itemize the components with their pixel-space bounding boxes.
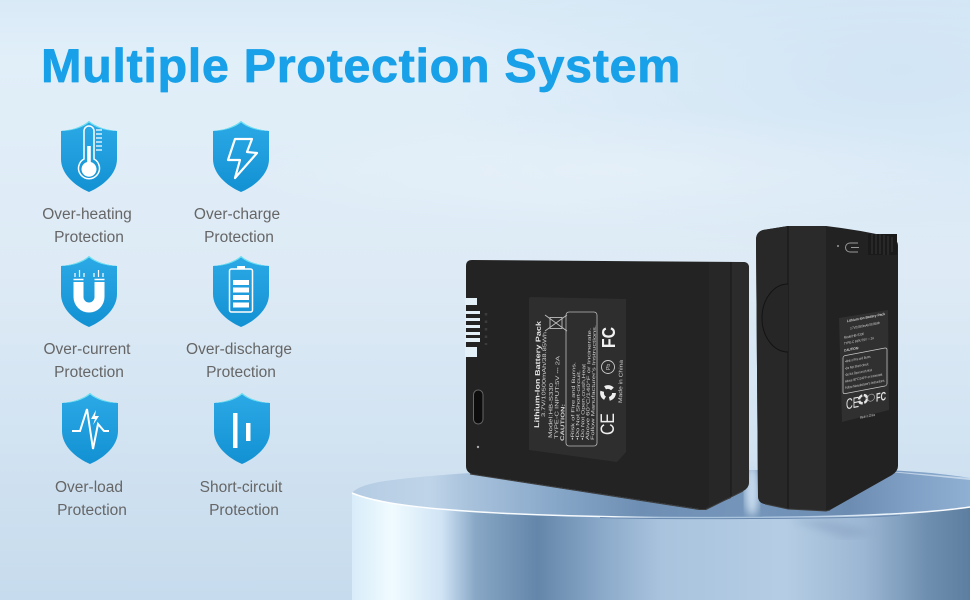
USB-C port (474, 390, 483, 424)
label: over-discharge protection: Protection (206, 364, 276, 381)
battery: side view with label (756, 226, 898, 511)
product label: •Risk of Fire and Burns. (845, 355, 871, 364)
product label: Follow Manufacturer's Instructions. (845, 379, 885, 390)
product label: TYPE-C INPUT:5V ⎓ 2A (554, 355, 561, 439)
label: short-circuit protection: Protection (209, 502, 279, 519)
icon: magnet shield (61, 256, 117, 327)
indicator light (477, 446, 479, 448)
top connector (837, 234, 897, 255)
feature: over-current protection (44, 256, 131, 381)
icon: pulse shield (62, 393, 118, 464)
product label: Follow Manufacturer's Instructions. (590, 325, 598, 440)
product label: •Do Not Open,crush,Heat (580, 363, 587, 440)
podium (352, 464, 970, 600)
label: over-discharge protection: Over-discharge (186, 341, 292, 358)
product label (529, 297, 626, 462)
product label: FC (599, 327, 619, 348)
thumb recess arc (762, 284, 788, 352)
label: over-heating protection: Over-heating (42, 206, 132, 223)
product label: CE (846, 394, 859, 413)
product label: •Do Not Short-circuit. (575, 370, 582, 440)
product label: TYPE-C INPUT:5V ⎓ 2A (844, 336, 874, 346)
label: over-load protection: Over-load (55, 479, 123, 496)
product label: Lithium-Ion Battery Pack (534, 321, 543, 428)
label: short-circuit protection: Short-circuit (200, 479, 283, 496)
product label: •Do Not Short-circuit. (845, 362, 869, 371)
label: over-charge protection: Protection (204, 229, 274, 246)
product label: Above 60°C/140°F or Incinerate. (585, 328, 593, 440)
title: Multiple Protection System (41, 40, 681, 93)
product label: 3.7V/10500mAh/38.85Wh (541, 332, 548, 417)
product label: CAUTION: (560, 404, 567, 441)
product label: FC (876, 389, 886, 405)
product label: 3.7V/10500mAh/38.85Wh (850, 321, 880, 331)
product label: Made in China (860, 413, 876, 420)
icon: battery shield (213, 256, 269, 327)
label: over-charge protection: Over-charge (194, 206, 280, 223)
icon: circuit gap shield (214, 393, 270, 464)
label: over-heating protection: Protection (54, 229, 124, 246)
feature: over-charge protection (194, 121, 280, 246)
product label: •Do Not Open,crush,Heat (845, 368, 872, 377)
label: over-current protection: Over-current (44, 341, 131, 358)
feature: over-heating protection (42, 121, 132, 246)
product label: Above 60°C/140°F or Incinerate. (845, 372, 883, 384)
icon: Pb mark: Pb (606, 364, 612, 370)
icon: recycle (602, 387, 614, 399)
battery: back view with label (465, 260, 749, 510)
icon: lightning shield (213, 121, 269, 192)
product label: Made in China (618, 360, 625, 403)
icon: crossed bin (545, 315, 567, 331)
product label: Lithium-Ion Battery Pack (847, 312, 886, 323)
product label (839, 310, 889, 423)
feature: over-load protection (55, 393, 127, 519)
icon: Pb mark (602, 360, 614, 374)
product label: Model:HB-S330 (844, 332, 864, 340)
label: over-current protection: Protection (54, 364, 124, 381)
feature: over-discharge protection (186, 256, 292, 381)
product label: CAUTION: (844, 346, 859, 353)
feature: short-circuit protection (200, 393, 283, 519)
product label: •Risk of Fire and Burns. (570, 362, 577, 440)
label: over-load protection: Protection (57, 502, 127, 519)
icon: thermometer shield (61, 121, 117, 192)
connector pins (465, 298, 486, 357)
compliance marks: CE (598, 413, 619, 435)
product label: Model:HB-S330 (548, 383, 555, 438)
